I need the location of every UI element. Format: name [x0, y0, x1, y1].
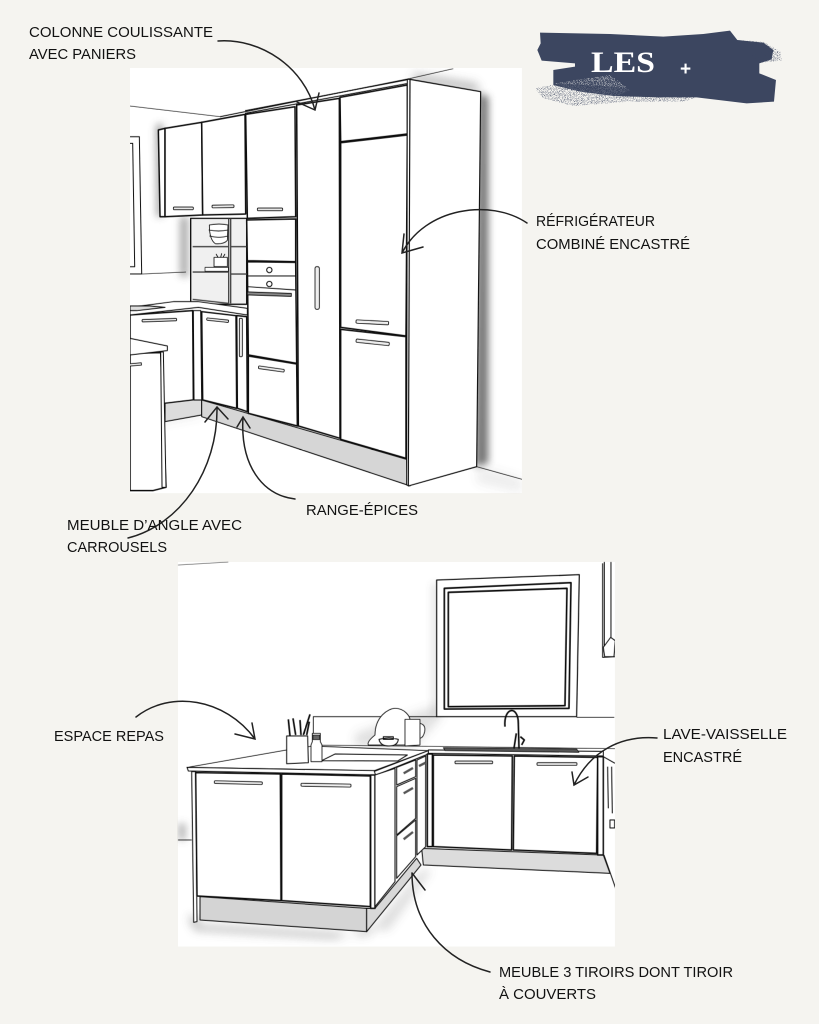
peninsula [129, 338, 167, 491]
illustration: tall kitchen units [129, 68, 522, 493]
label: meuble 3 tiroirs: À COUVERTS [499, 986, 596, 1003]
open shelves [191, 218, 247, 304]
label: colonne coulissante: COLONNE COULISSANTE [29, 24, 213, 41]
arrow: réfrigérateur [402, 210, 527, 253]
arrows [128, 41, 657, 972]
label: colonne coulissante: AVEC PANIERS [29, 46, 136, 63]
arrow: meuble d'angle [128, 407, 228, 538]
right appliance [603, 757, 616, 888]
fridge column [340, 85, 407, 458]
arrow: lave-vaisselle [572, 738, 657, 785]
label: meuble d'angle [67, 517, 242, 556]
faucet [505, 711, 524, 748]
plinth [202, 400, 407, 485]
label: espace repas: ESPACE REPAS [54, 728, 164, 745]
label: colonne coulissante [29, 24, 213, 63]
wall cabinets [158, 107, 296, 218]
side drawers [371, 756, 426, 908]
label: lave-vaisselle: LAVE-VAISSELLE [663, 726, 787, 743]
backsplash and back counter [313, 717, 615, 756]
wall details [178, 562, 615, 840]
label: lave-vaisselle [663, 726, 787, 766]
wall and window [130, 69, 522, 479]
label: réfrigérateur: RÉFRIGÉRATEUR [536, 213, 655, 230]
label: range-épices: RANGE-ÉPICES [306, 502, 418, 519]
label: réfrigérateur [536, 213, 690, 253]
oven column [247, 219, 297, 426]
banner: les + [535, 31, 782, 106]
label: meuble 3 tiroirs: MEUBLE 3 TIROIRS DONT TIROIR [499, 964, 733, 981]
arrow: range-épices [237, 417, 295, 499]
arrow: meuble 3 tiroirs [412, 873, 490, 972]
pull-out column [297, 98, 340, 438]
base cabinets [130, 302, 247, 422]
plinths [200, 848, 610, 932]
soft wall shadows [130, 73, 522, 493]
label: meuble 3 tiroirs [499, 964, 733, 1003]
top trim and side panel [245, 79, 481, 486]
soft floor and wall shadows [178, 583, 442, 938]
banner plus sign: + [680, 59, 691, 80]
island doors [192, 772, 370, 922]
label: meuble d'angle: MEUBLE D’ANGLE AVEC [67, 517, 242, 534]
utensil pot and bottle [287, 714, 322, 764]
label: lave-vaisselle: ENCASTRÉ [663, 749, 742, 766]
plate and jug [368, 708, 425, 746]
back run doors [427, 754, 603, 855]
arrow: espace repas [136, 701, 255, 739]
label: réfrigérateur: COMBINÉ ENCASTRÉ [536, 236, 690, 253]
peninsula top [187, 746, 428, 775]
arrow: colonne coulissante [218, 41, 319, 110]
label: meuble d'angle: CARROUSELS [67, 539, 167, 556]
banner heading: LES [591, 46, 655, 79]
illustration: L-shaped kitchen [178, 562, 616, 947]
window [437, 575, 579, 717]
